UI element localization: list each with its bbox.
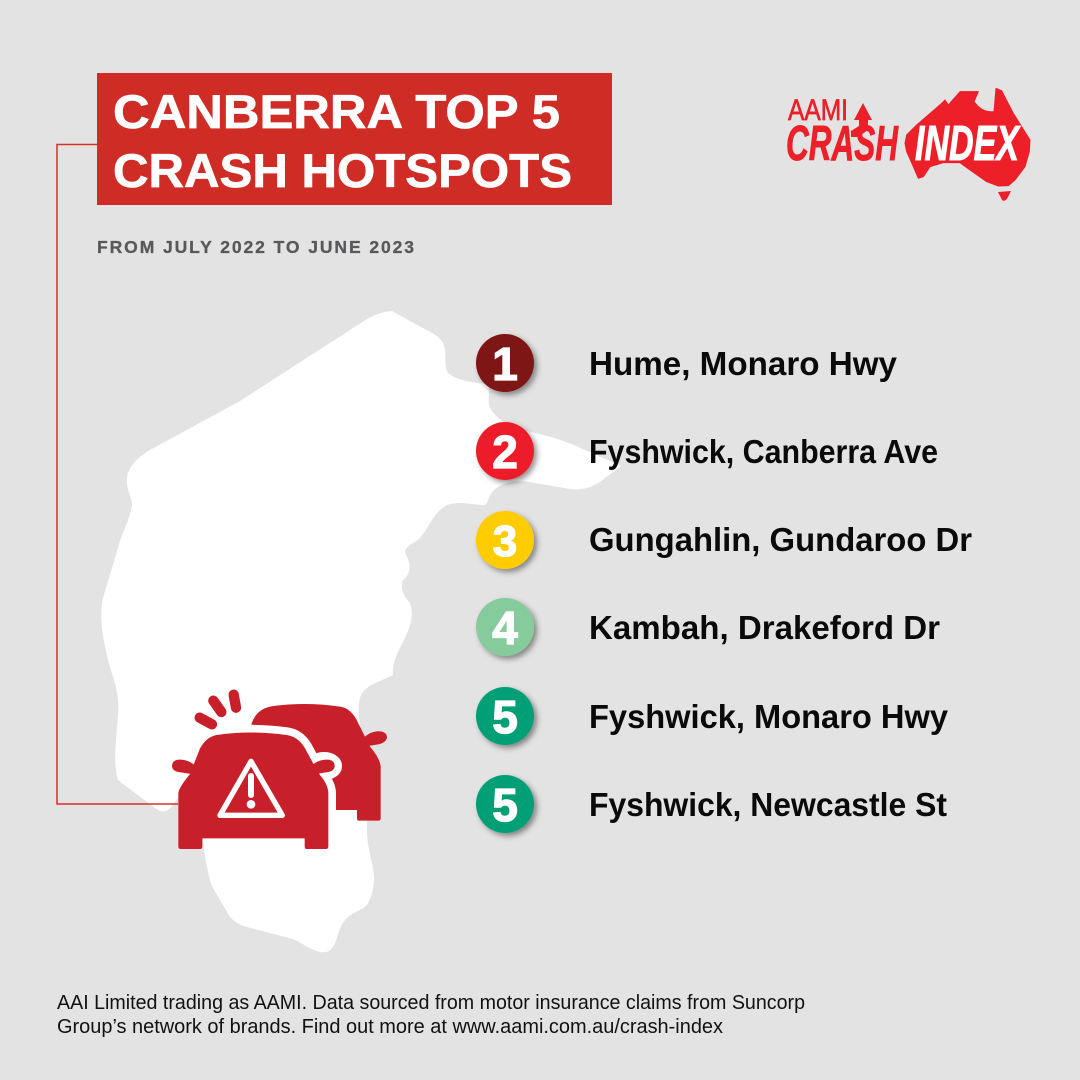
logo wordmark: AAMI xyxy=(788,94,848,127)
impact marks xyxy=(200,695,236,724)
hotspot 5b xyxy=(476,775,947,833)
hotspot 2: Fyshwick, Canberra Ave xyxy=(589,433,938,470)
map of Canberra xyxy=(101,311,621,952)
hotspot 2: 2 xyxy=(492,426,518,478)
hotspot 3 xyxy=(476,511,972,569)
icon: crashed cars with warning xyxy=(172,695,387,849)
hotspot 3: 3 xyxy=(493,517,517,566)
hotspot 5a xyxy=(476,687,949,745)
footer note: Group’s network of brands. Find out more at www.aami.com.au/crash-index xyxy=(57,1016,723,1038)
hotspot 1: 1 xyxy=(492,338,518,390)
footer note: AAI Limited trading as AAMI. Data sourced from motor insurance claims from Suncorp xyxy=(57,992,805,1014)
hotspot 4: Kambah, Drakeford Dr xyxy=(589,609,940,646)
hotspot 5b: 5 xyxy=(492,779,518,831)
hotspot 4: 4 xyxy=(492,602,518,654)
hotspot 5a: 5 xyxy=(492,691,518,743)
hotspot 5a: Fyshwick, Monaro Hwy xyxy=(589,698,949,735)
white halo around front car xyxy=(252,724,342,810)
title banner xyxy=(97,73,612,205)
hotspot 2 xyxy=(476,422,938,480)
logo INDEX text: INDEX xyxy=(915,117,1021,171)
rear car xyxy=(250,704,387,821)
hotspot 1: Hume, Monaro Hwy xyxy=(589,345,898,382)
subtitle: FROM JULY 2022 TO JUNE 2023 xyxy=(97,237,414,257)
footer note xyxy=(57,992,805,1038)
logo wordmark xyxy=(786,94,899,171)
logo: AAMI Crash Index xyxy=(786,88,1030,201)
hotspot 3: Gungahlin, Gundaroo Dr xyxy=(589,521,972,558)
connector line xyxy=(57,144,178,804)
hotspot list xyxy=(476,334,972,833)
hotspot 4 xyxy=(476,598,940,656)
title text: CANBERRA TOP 5 xyxy=(113,85,560,138)
front car xyxy=(172,732,335,849)
warning triangle xyxy=(220,761,282,815)
hotspot 5b: Fyshwick, Newcastle St xyxy=(589,786,947,823)
logo wordmark: CRASH xyxy=(786,117,899,171)
hotspot 1 xyxy=(476,334,898,392)
logo Tasmania xyxy=(998,191,1011,201)
title text xyxy=(113,85,572,197)
title text: CRASH HOTSPOTS xyxy=(113,144,572,197)
logo Australia map xyxy=(905,88,1030,186)
